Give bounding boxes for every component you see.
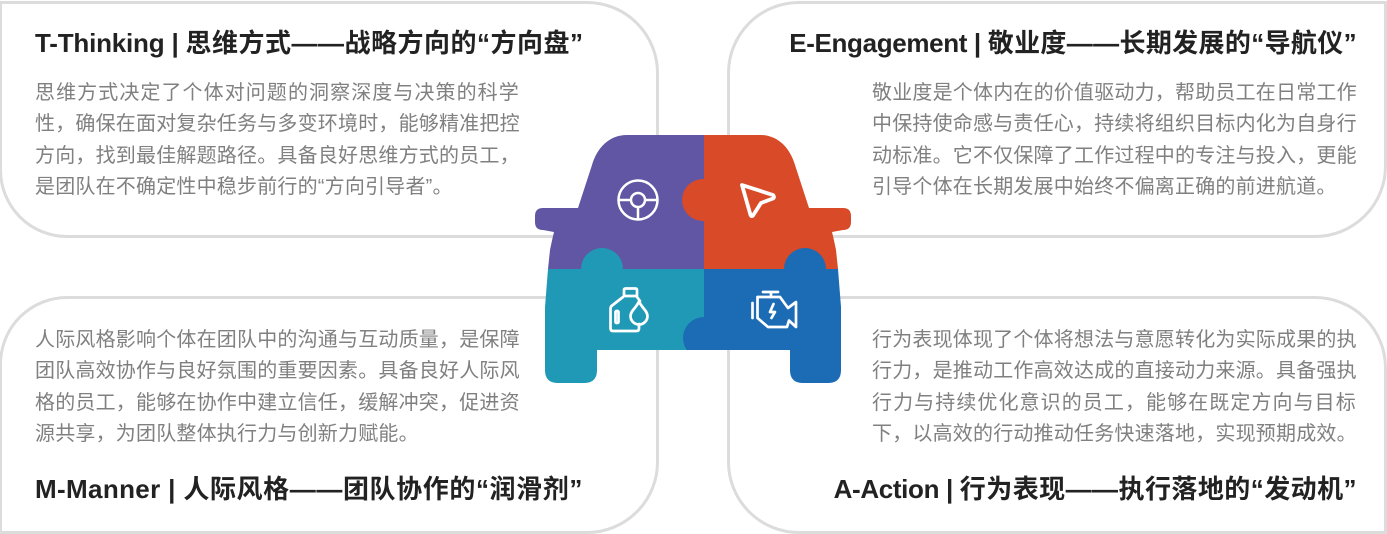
text block: A-Action description: 行为表现体现了个体将想法与意愿转化为实际成果的执 bbox=[872, 328, 1357, 350]
text block: E-Engagement description: 敬业度是个体内在的价值驱动力，帮助员工在日常工作 bbox=[872, 82, 1357, 104]
puzzle piece: teal bottom-left bbox=[545, 248, 704, 383]
panel: T-Thinking bbox=[0, 1, 659, 238]
text block: M-Manner description bbox=[35, 328, 520, 445]
puzzle piece: purple top-left bbox=[530, 130, 704, 269]
text block: M-Manner description: 人际风格影响个体在团队中的沟通与互动质量，是保障 bbox=[35, 328, 520, 350]
icon: navigation arrow bbox=[742, 185, 774, 216]
text block: T-Thinking description: 思维方式决定了个体对问题的洞察深度与决策的科学 bbox=[35, 82, 520, 104]
text block: A-Action description: 行力，是推动工作高效达成的直接动力来源。具备强执 bbox=[872, 360, 1357, 382]
icon: oil bottle bbox=[610, 288, 648, 331]
text block: E-Engagement description: 中保持使命感与责任心，持续将组织目标内化为自身行 bbox=[872, 113, 1357, 135]
text block: E-Engagement description: 引导个体在长期发展中始终不偏离正确的前进航道。 bbox=[872, 176, 1337, 198]
text block: A-Action description bbox=[872, 328, 1357, 445]
panel: A-Action bbox=[727, 296, 1387, 534]
puzzle piece: orange top-right bbox=[682, 130, 854, 269]
text block: T-Thinking description: 是团队在不确定性中稳步前行的“方向引导者”。 bbox=[35, 176, 453, 198]
text block: M-Manner description: 格的员工，能够在协作中建立信任，缓解冲突，促进资 bbox=[35, 392, 520, 414]
text block: T-Thinking description bbox=[35, 82, 520, 198]
text block: T-Thinking description: 性，确保在面对复杂任务与多变环境时，能够精准把控 bbox=[35, 113, 520, 135]
heading: E-Engagement: E-Engagement | 敬业度——长期发展的“导航仪” bbox=[789, 28, 1357, 58]
panel: M-Manner bbox=[0, 296, 659, 534]
text block: A-Action description: 行力与持续优化意识的员工，能够在既定方向与目标 bbox=[872, 392, 1357, 414]
heading: M-Manner: M-Manner | 人际风格——团队协作的“润滑剂” bbox=[35, 474, 583, 504]
icon: engine warning bbox=[752, 292, 796, 327]
text block: M-Manner description: 源共享，为团队整体执行力与创新力赋能。 bbox=[35, 423, 419, 445]
text block: E-Engagement description bbox=[872, 82, 1357, 198]
heading: T-Thinking: T-Thinking | 思维方式——战略方向的“方向盘” bbox=[35, 28, 584, 58]
text block: E-Engagement description: 动标准。它不仅保障了工作过程中的专注与投入，更能 bbox=[872, 144, 1357, 166]
icon: steering wheel bbox=[618, 180, 658, 220]
heading: A-Action: A-Action | 行为表现——执行落地的“发动机” bbox=[834, 474, 1357, 504]
text block: M-Manner description: 团队高效协作与良好氛围的重要因素。具备良好人际风 bbox=[35, 360, 520, 382]
text block: A-Action description: 下，以高效的行动推动任务快速落地，实现预期成效。 bbox=[872, 423, 1357, 445]
panel: E-Engagement bbox=[727, 1, 1387, 238]
text block: T-Thinking description: 方向，找到最佳解题路径。具备良好思维方式的员工， bbox=[35, 144, 520, 166]
car puzzle graphic bbox=[535, 135, 851, 383]
puzzle piece: blue bottom-right bbox=[683, 248, 841, 383]
